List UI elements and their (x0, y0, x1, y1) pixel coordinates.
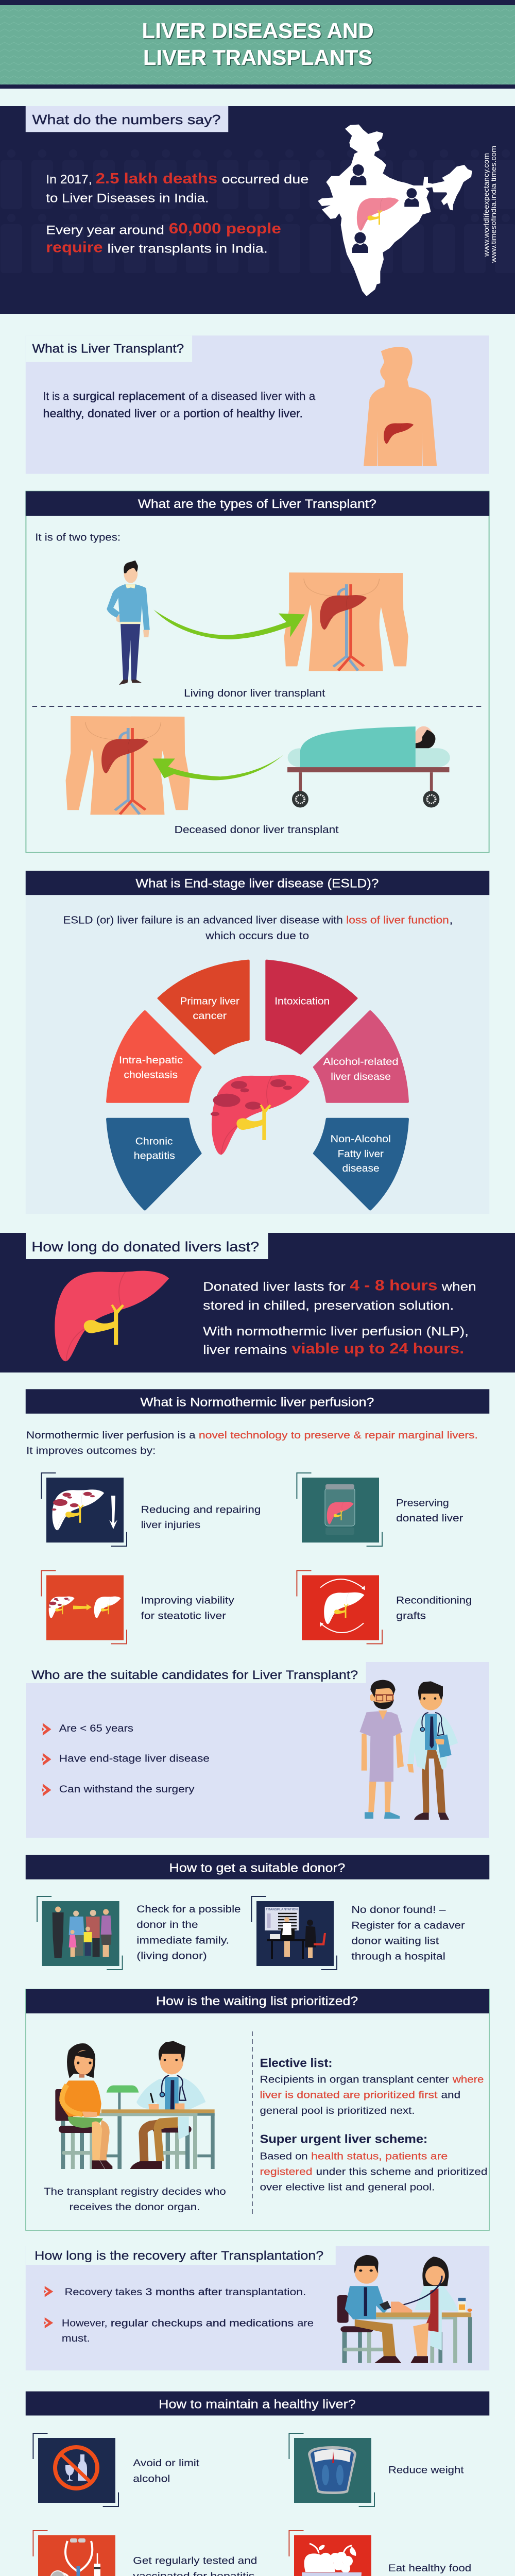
heading: donated livers: How long do donated livers last? (31, 1240, 259, 1255)
text block: preservation times: Donated liver lasts for (203, 1279, 346, 1294)
segment: chronic hepatitis (108, 1119, 200, 1209)
panel: suitable donor (26, 1855, 489, 1970)
text block: super urgent scheme: Based on (260, 2151, 308, 2162)
icon: recipient torso, living donor (284, 572, 408, 671)
text block: super urgent scheme: Super urgent liver scheme: (260, 2132, 427, 2146)
text block: preservation times: when (441, 1279, 476, 1294)
segment: intra-hepatic cholestasis: Intra-hepatic (119, 1055, 183, 1066)
heading: candidates: Who are the suitable candidates for Liver Transplant? (31, 1668, 358, 1682)
text block: elective list: Recipients in organ transplant center (260, 2074, 449, 2085)
segment: alcohol-related liver disease (314, 1011, 407, 1102)
text: check family: Check for a possible (136, 1903, 241, 1915)
text: sources: www.timesofindia.india times.com (489, 146, 497, 263)
text: register (351, 1904, 465, 1962)
text block: ESLD definition (63, 914, 453, 941)
text: reducing and repairing (141, 1504, 261, 1531)
icon tile: transplantation registration: TRANSPLANTATION (266, 1908, 298, 1911)
segment: alcohol-related liver disease: liver disease (331, 1071, 391, 1082)
list: recovery facts: However, (62, 2317, 108, 2329)
text: preserving: donated liver (396, 1512, 463, 1523)
icon: India map with liver (318, 125, 472, 296)
header banner (0, 0, 515, 89)
panel: what do the numbers say (0, 106, 515, 314)
icon: living donor man (107, 561, 150, 685)
caption: living donor: Living donor liver transplant (184, 688, 325, 699)
heading: recovery: How long is the recovery after Transplantation? (35, 2249, 323, 2262)
text block: definition: of a diseased liver with a (188, 390, 316, 403)
segment: intoxication: Intoxication (274, 995, 330, 1007)
caption: deceased donor: Deceased donor liver transplant (175, 824, 339, 836)
list: recovery facts: must. (62, 2333, 90, 2344)
segment: intra-hepatic cholestasis (108, 1011, 200, 1102)
icon tile: family (37, 1896, 123, 1970)
caption: registry decides (44, 2186, 226, 2213)
icon: diseased liver (211, 1075, 310, 1155)
text: check family: donor in the (136, 1919, 198, 1930)
segment: non-alcohol fatty liver disease: disease (342, 1162, 380, 1174)
segment: non-alcohol fatty liver disease (314, 1119, 407, 1209)
segment: intra-hepatic cholestasis: cholestasis (124, 1069, 178, 1080)
panel: suitable candidates (26, 1662, 489, 1838)
list: recovery facts: 3 months after (146, 2286, 222, 2298)
text block: ESLD definition: ESLD (or) liver failure is an advanced liver disease with (63, 914, 343, 926)
icon: deceased donor on stretcher (287, 726, 450, 808)
text: reconditioning (396, 1595, 472, 1621)
list: recovery facts: are (297, 2317, 314, 2329)
text block: deaths statistic: 2.5 lakh deaths (96, 171, 217, 187)
text block: elective list (260, 2056, 484, 2116)
panel: end-stage liver disease (26, 871, 489, 1214)
icon tile: preserving donated liver (297, 1473, 382, 1546)
text block: elective list: where (452, 2074, 484, 2085)
segment: alcohol-related liver disease: Alcohol-related (323, 1056, 399, 1067)
icon: patient and doctor at desk (55, 2041, 215, 2169)
icon tile: weighing scale (289, 2433, 374, 2506)
text: sources (482, 146, 497, 263)
text block: ESLD definition: loss of liver function (346, 914, 449, 926)
text block: normothermic intro: novel technology to preserve & repair marginal livers. (199, 1430, 478, 1441)
text block: elective list: general pool is prioritized next. (260, 2105, 415, 2116)
panel: maintain a healthy liver (26, 2392, 489, 2576)
icon tile: reconditioning grafts (297, 1570, 382, 1643)
heading: numbers: What do the numbers say? (32, 112, 221, 127)
text: reducing and repairing: liver injuries (141, 1519, 200, 1531)
text block: elective list: liver is donated are prioritized first (260, 2089, 437, 2100)
text block: deaths statistic: In 2017, (46, 173, 92, 187)
text: register: No donor found! – (351, 1904, 446, 1916)
text block: preservation times: With normothermic liver perfusion (NLP), (203, 1324, 469, 1338)
text block: preservation times: stored in chilled, preservation solution. (203, 1298, 454, 1313)
title: LIVER DISEASES AND (142, 19, 374, 43)
icon: patient and doctor (359, 1680, 458, 1820)
text: improving viability: Improving viability (141, 1595, 234, 1606)
text: register: donor waiting list (351, 1935, 439, 1946)
icon tile: improving viability (41, 1570, 127, 1643)
text: check family (136, 1903, 241, 1961)
text: two types intro: It is of two types: (35, 532, 121, 544)
text: improving viability: for steatotic liver (141, 1610, 226, 1621)
text block: deaths statistic: to Liver Diseases in India. (46, 191, 209, 205)
title (142, 19, 374, 70)
text: improving viability (141, 1595, 234, 1621)
text block: super urgent scheme: registered (260, 2166, 313, 2177)
panel: how long do donated livers last (0, 1233, 515, 1372)
text block: transplant need statistic: require (46, 239, 103, 256)
text block: super urgent scheme (260, 2132, 487, 2193)
text block: definition: portion of healthy liver. (183, 408, 303, 420)
heading: what is liver transplant: What is Liver Transplant? (32, 342, 184, 355)
panel: recovery after transplantation (26, 2246, 489, 2370)
text block: preservation times: 4 - 8 hours (350, 1277, 437, 1294)
text block: normothermic intro: It improves outcomes by: (26, 1445, 156, 1456)
icon tile: fruit bowl (289, 2531, 374, 2576)
text block: definition: It is a (43, 390, 69, 403)
icon tile: stethoscope and syringe (33, 2531, 118, 2576)
list: candidate criteria: Are < 65 years (59, 1722, 133, 1734)
text: avoid alcohol: Avoid or limit (133, 2458, 199, 2469)
list: candidate criteria (42, 1722, 210, 1797)
icon: recipient torso, deceased donor (66, 716, 190, 815)
segment: chronic hepatitis: hepatitis (134, 1150, 175, 1161)
text block: ESLD definition: , (449, 914, 453, 926)
list: recovery facts: Recovery takes (65, 2286, 142, 2298)
arrow: donor to recipient (153, 609, 305, 639)
text block: definition: healthy, donated liver (43, 408, 157, 420)
icon tile: reducing liver injuries (41, 1473, 127, 1546)
icon: healthy liver (55, 1271, 169, 1361)
caption: registry decides: receives the donor organ. (70, 2201, 200, 2213)
text block: super urgent scheme: health status, patients are (311, 2151, 448, 2162)
text: avoid alcohol (133, 2458, 199, 2484)
heading: ESLD: What is End-stage liver disease (ESLD)? (135, 876, 379, 890)
text: check family: immediate family. (136, 1935, 229, 1946)
heading: types: What are the types of Liver Transplant? (138, 497, 376, 511)
heading: healthy liver: How to maintain a healthy liver? (159, 2398, 356, 2411)
icon: doctor checking blood pressure (337, 2255, 472, 2363)
icon: human silhouette with liver (364, 347, 437, 466)
heading: waiting list: How is the waiting list prioritized? (156, 1994, 358, 2008)
icon tile: no alcohol (33, 2433, 118, 2506)
text block: transplant need statistic: 60,000 people (169, 221, 281, 237)
panel: types of liver transplant (26, 491, 489, 853)
text block: definition: or a (160, 408, 180, 420)
text: eat healthy: Eat healthy food (388, 2563, 471, 2574)
text block: normothermic intro (26, 1430, 478, 1456)
text: reduce weight: Reduce weight (388, 2465, 464, 2476)
text block: definition: surgical replacement (73, 390, 185, 403)
text: preserving (396, 1497, 463, 1523)
icon tile: transplantation registration (251, 1896, 337, 1970)
text block: preservation times (203, 1277, 476, 1357)
text block: elective list: Elective list: (260, 2056, 332, 2070)
list: recovery facts (44, 2286, 314, 2344)
segment: non-alcohol fatty liver disease: Non-Alcohol (331, 1133, 391, 1145)
segment: intoxication (267, 961, 356, 1054)
text block: deaths statistic (46, 171, 308, 205)
list: recovery facts: regular checkups and medications (111, 2317, 294, 2329)
text block: ESLD definition: which occurs due to (205, 930, 309, 941)
text block: transplant need statistic (46, 221, 281, 256)
text: reconditioning: Reconditioning (396, 1595, 472, 1606)
text block: preservation times: liver remains (203, 1343, 287, 1357)
text: register: through a hospital (351, 1951, 445, 1962)
text block: super urgent scheme: over elective list and general pool. (260, 2181, 435, 2193)
text: reconditioning: grafts (396, 1610, 426, 1621)
list: candidate criteria: Have end-stage liver disease (59, 1753, 210, 1764)
segment: primary liver cancer: Primary liver (180, 995, 239, 1007)
text block: deaths statistic: occurred due (221, 173, 308, 187)
text: reducing and repairing: Reducing and repairing (141, 1504, 261, 1515)
panel: what is liver transplant (26, 335, 489, 474)
segment: primary liver cancer (159, 961, 248, 1054)
text block: preservation times: viable up to 24 hours. (291, 1340, 464, 1357)
text: register: Register for a cadaver (351, 1920, 465, 1931)
text: check family: (living donor) (136, 1950, 207, 1961)
list: recovery facts: transplantation. (226, 2286, 306, 2298)
segment: primary liver cancer: cancer (193, 1010, 227, 1021)
text: tested and vaccinated (133, 2555, 257, 2576)
text: preserving: Preserving (396, 1497, 449, 1509)
segment: chronic hepatitis: Chronic (135, 1136, 173, 1147)
text block: transplant need statistic: Every year around (46, 223, 164, 237)
panel: waiting list prioritized (26, 1989, 489, 2230)
text: avoid alcohol: alcohol (133, 2473, 170, 2484)
heading: donor: How to get a suitable donor? (169, 1860, 345, 1875)
title: LIVER TRANSPLANTS (143, 46, 372, 70)
list: candidate criteria: Can withstand the surgery (59, 1783, 195, 1794)
text: tested and vaccinated: Get regularly tested and (133, 2555, 257, 2567)
text block: transplant need statistic: liver transplants in India. (108, 242, 268, 256)
panel: normothermic liver perfusion (26, 1389, 489, 1643)
text block: elective list: and (441, 2089, 460, 2100)
caption: registry decides: The transplant registry decides who (44, 2186, 226, 2197)
text block: definition (43, 390, 316, 420)
heading: normothermic: What is Normothermic liver perfusion? (140, 1395, 374, 1409)
segment: non-alcohol fatty liver disease: Fatty liver (338, 1148, 384, 1159)
text block: normothermic intro: Normothermic liver perfusion is a (26, 1430, 196, 1441)
arrow: deceased donor to recipient (153, 755, 283, 780)
text: sources: www.worldlifeexpectancy.com (482, 153, 490, 257)
